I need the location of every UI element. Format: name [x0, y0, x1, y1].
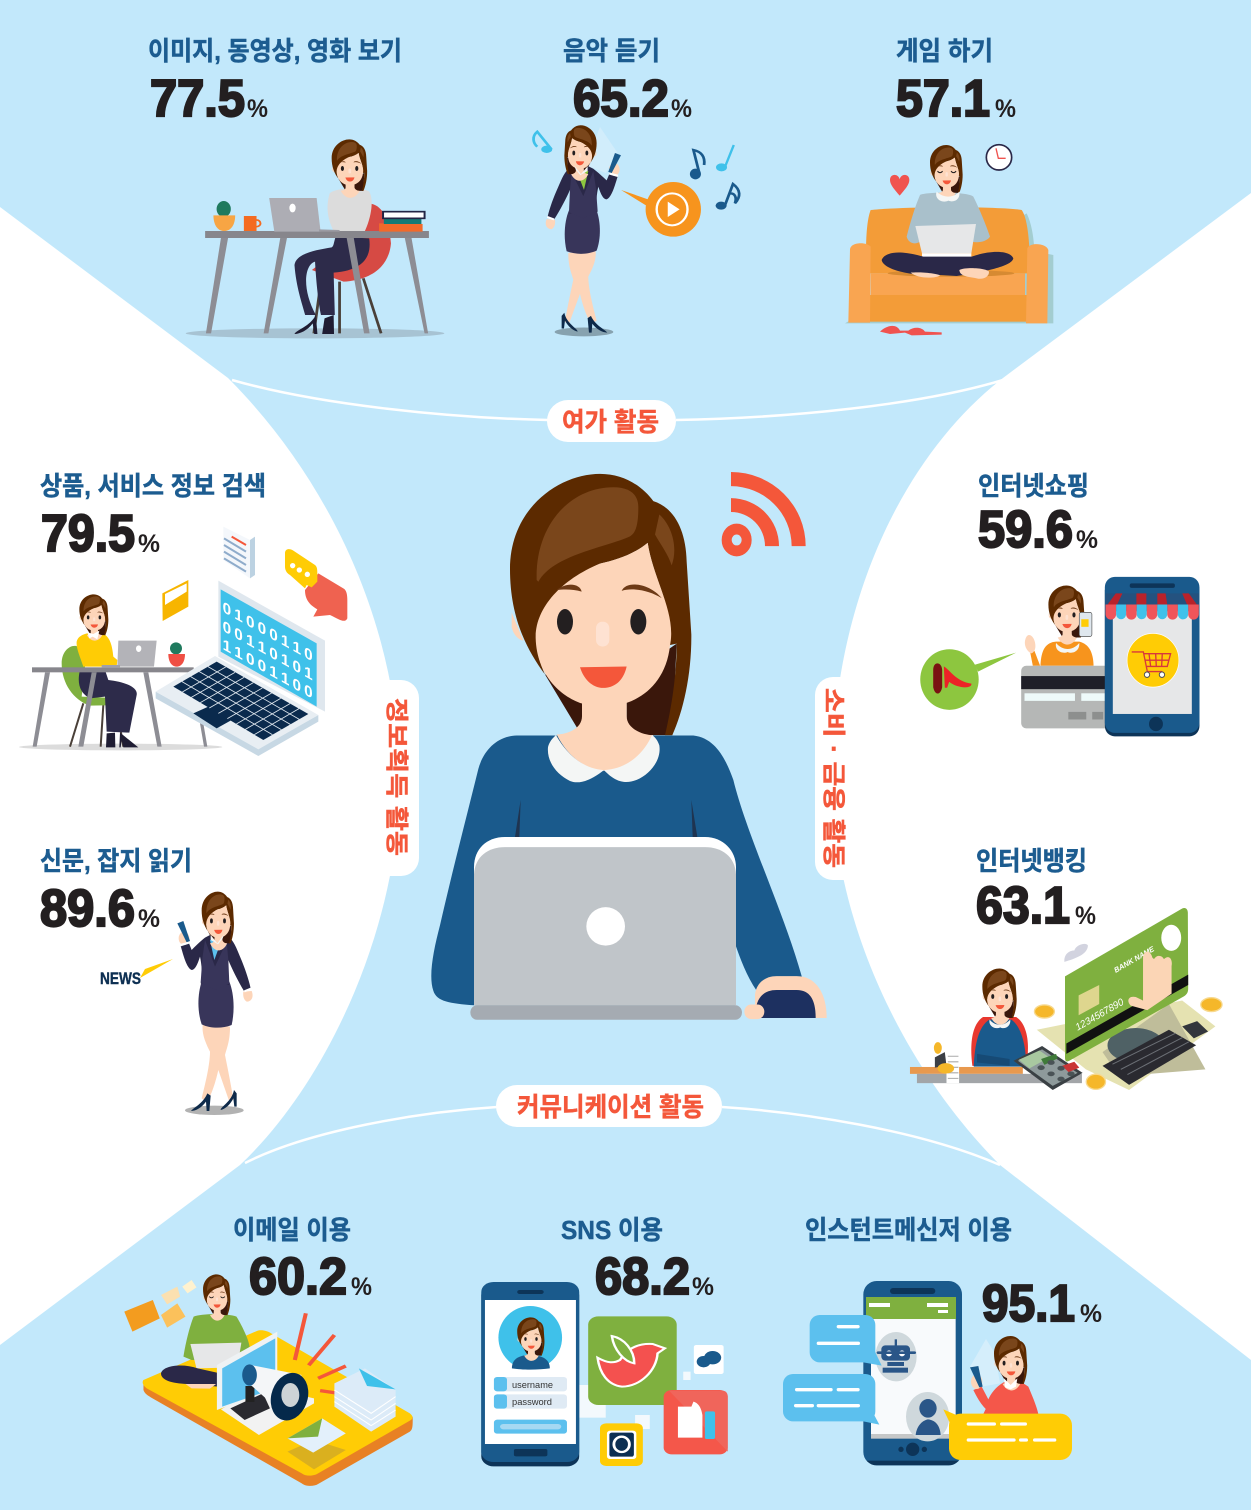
heading: 인스턴트메신저 이용 — [805, 1215, 1012, 1245]
heading: 이미지, 동영상, 영화 보기 — [148, 36, 402, 66]
illustration: woman on sofa — [845, 145, 1053, 335]
value: 95.1 — [982, 1275, 1075, 1333]
heading: SNS 이용 — [561, 1215, 663, 1245]
value: 65.2 — [573, 70, 669, 128]
category label: information — [360, 680, 419, 876]
illustration: standing woman with phone — [546, 125, 621, 336]
value: 68.2 — [595, 1248, 690, 1306]
panel: listening to music — [534, 36, 739, 336]
percent sign: % — [671, 95, 692, 123]
panel: email use — [124, 1215, 413, 1486]
login field labels — [512, 1380, 553, 1408]
icon: wifi signal — [727, 472, 806, 551]
news callout: NEWS — [100, 969, 141, 988]
heading: 이메일 이용 — [233, 1215, 351, 1245]
category label: leisure — [547, 400, 676, 442]
value: 57.1 — [896, 70, 990, 128]
login field labels: password — [512, 1397, 552, 1408]
panel: playing games — [845, 36, 1053, 335]
illustration: woman with phone — [177, 892, 253, 1115]
percent sign: % — [995, 95, 1016, 123]
illustration: banking woman and credit card: 1234567890 — [1074, 997, 1126, 1033]
value: 63.1 — [976, 877, 1070, 935]
illustration: banking woman and credit card — [910, 908, 1222, 1090]
illustration: banking woman and credit card: BANK NAME — [1112, 944, 1157, 975]
heading: 인터넷뱅킹 — [976, 846, 1087, 876]
heading: 인터넷쇼핑 — [978, 471, 1089, 501]
heading: 상품, 서비스 정보 검색 — [40, 471, 266, 501]
value: 59.6 — [978, 501, 1073, 559]
panel: internet shopping — [920, 471, 1199, 736]
value: 89.6 — [40, 880, 135, 938]
category label: communication — [496, 1085, 722, 1127]
heading: 게임 하기 — [896, 36, 993, 66]
icon: music notes and play button — [534, 132, 739, 237]
illustration: shopping woman, card and phone — [920, 577, 1199, 736]
central woman with laptop — [431, 474, 827, 1020]
value: 77.5 — [150, 70, 245, 128]
category label: information: 정보획득 활동 — [384, 698, 410, 856]
panel: reading newspapers and magazines — [40, 846, 253, 1115]
panel: internet banking — [910, 846, 1222, 1090]
binary code on screen — [223, 599, 313, 703]
value: 60.2 — [249, 1248, 347, 1306]
panel: social media use — [481, 1215, 728, 1466]
percent sign: % — [138, 905, 160, 933]
percent sign: % — [351, 1273, 372, 1301]
laptop — [470, 837, 742, 1020]
panel: instant messenger use — [783, 1215, 1102, 1465]
panel: product and service search — [19, 471, 347, 756]
category label: communication: 커뮤니케이션 활동 — [517, 1092, 704, 1122]
heading: 음악 듣기 — [563, 36, 660, 66]
binary code on screen: 0 0 1 1 0 1 0 1 — [223, 618, 313, 684]
panel: watching images, video and movies — [148, 36, 444, 338]
category label: leisure: 여가 활동 — [562, 407, 659, 437]
collar — [548, 735, 660, 782]
category label: consumption and finance — [815, 677, 875, 880]
value: 79.5 — [41, 505, 135, 563]
percent sign: % — [1080, 1300, 1102, 1328]
illustration: email platform — [124, 1274, 413, 1486]
percent sign: % — [1076, 526, 1098, 554]
illustration: phone chat and woman — [783, 1281, 1072, 1465]
heading: 신문, 잡지 읽기 — [40, 846, 192, 876]
news callout — [100, 959, 173, 988]
category label: consumption and finance: 소비 · 금융 활동 — [821, 688, 847, 868]
hand on mouse — [744, 976, 827, 1019]
binary code on screen: 0 1 0 0 0 1 1 0 — [223, 599, 313, 665]
sweater — [431, 736, 802, 1005]
illustration: woman at desk — [186, 139, 444, 338]
percent sign: % — [247, 95, 268, 123]
illustration: woman at desk with large laptop — [19, 527, 347, 756]
illustration: phone login and app icons — [481, 1282, 728, 1466]
percent sign: % — [1075, 902, 1096, 930]
login field labels: username — [512, 1380, 553, 1391]
phone light beam — [585, 127, 617, 173]
percent sign: % — [692, 1273, 714, 1301]
binary code on screen: 1 1 0 0 1 1 0 0 — [223, 636, 313, 703]
percent sign: % — [138, 530, 160, 558]
